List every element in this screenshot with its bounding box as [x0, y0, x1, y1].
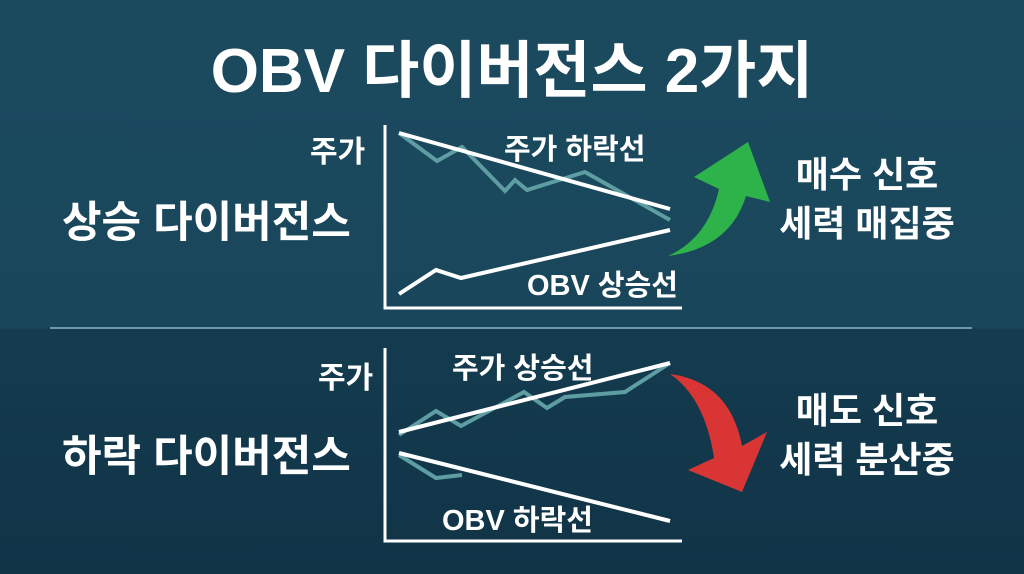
label: bullish divergence: 상승 다이버전스 [62, 199, 351, 247]
label: bearish divergence: 하락 다이버전스 [62, 433, 351, 481]
callout: buy signal: 세력 매집중 [779, 203, 955, 244]
title: OBV 다이버전스 2가지 [211, 37, 813, 106]
icon: red down arrow [670, 374, 767, 492]
chart: bullish: 주가 [310, 136, 365, 169]
callout: sell signal: 매도 신호 [796, 390, 938, 431]
chart: bullish: 주가 하락선 [504, 133, 645, 166]
chart: bearish [318, 348, 682, 541]
chart: bearish: 주가 [318, 362, 373, 395]
chart: bullish [310, 125, 682, 308]
callout: sell signal [779, 390, 955, 480]
callout: buy signal: 매수 신호 [796, 154, 938, 195]
icon: green up arrow [668, 142, 770, 256]
callout: buy signal [779, 154, 955, 244]
chart: bearish: 주가 상승선 [452, 352, 593, 385]
chart: bearish: OBV 하락선 [442, 504, 593, 537]
callout: sell signal: 세력 분산중 [779, 439, 955, 480]
chart: bullish: OBV 상승선 [527, 269, 678, 302]
